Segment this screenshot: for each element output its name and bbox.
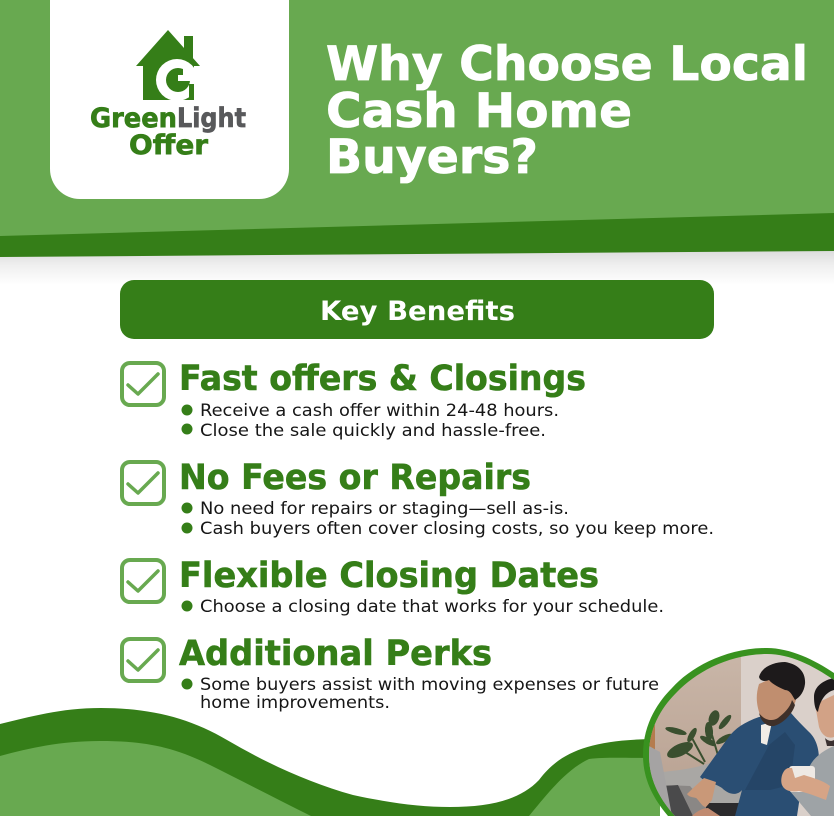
benefit: flexible closing: Flexible Closing Dates: [179, 556, 599, 596]
icon: house logo: [136, 30, 200, 101]
benefit: additional perks: Some buyers assist with moving expenses or future: [200, 675, 659, 695]
laptop: [649, 746, 706, 816]
benefit: no fees: Cash buyers often cover closing costs, so you keep more.: [200, 519, 714, 539]
logo wordmark: Light: [177, 103, 246, 134]
benefit: fast offers: Fast offers & Closings: [179, 359, 586, 399]
icon: checkbox: [122, 639, 164, 681]
logo wordmark: [90, 103, 246, 161]
benefit: additional perks: [122, 634, 659, 713]
header banner: [0, 0, 834, 285]
section heading: Key Benefits: [120, 280, 714, 339]
icon: checkbox: [122, 560, 164, 602]
icon: checkbox: [122, 462, 164, 504]
logo card: [50, 0, 289, 199]
title: Why Choose Local: [326, 37, 808, 92]
benefit: flexible closing: Choose a closing date that works for your schedule.: [200, 597, 664, 617]
benefit: fast offers: [122, 359, 586, 441]
sofa: [663, 761, 745, 816]
title: Cash Home: [326, 84, 632, 139]
benefit: fast offers: Close the sale quickly and hassle-free.: [200, 421, 546, 441]
benefit: additional perks: home improvements.: [200, 693, 390, 713]
woman: [781, 678, 834, 816]
title: [326, 37, 808, 185]
title: Buyers?: [326, 130, 538, 185]
section heading: Key Benefits: Key Benefits: [320, 296, 515, 327]
photo: couple at laptop: [643, 648, 834, 816]
benefit: fast offers: Receive a cash offer within 24-48 hours.: [200, 401, 559, 421]
footer wave: [0, 708, 660, 816]
benefit: no fees: [122, 458, 714, 539]
benefit: no fees: No need for repairs or staging—sell as-is.: [200, 499, 569, 519]
logo wordmark: Green: [90, 103, 177, 134]
benefit: flexible closing: [122, 556, 664, 617]
benefit: additional perks: Additional Perks: [179, 634, 492, 674]
plant: [665, 709, 733, 764]
logo wordmark: Offer: [129, 130, 209, 161]
man: [687, 662, 819, 816]
icon: checkbox: [122, 363, 164, 405]
benefit: no fees: No Fees or Repairs: [179, 458, 531, 498]
